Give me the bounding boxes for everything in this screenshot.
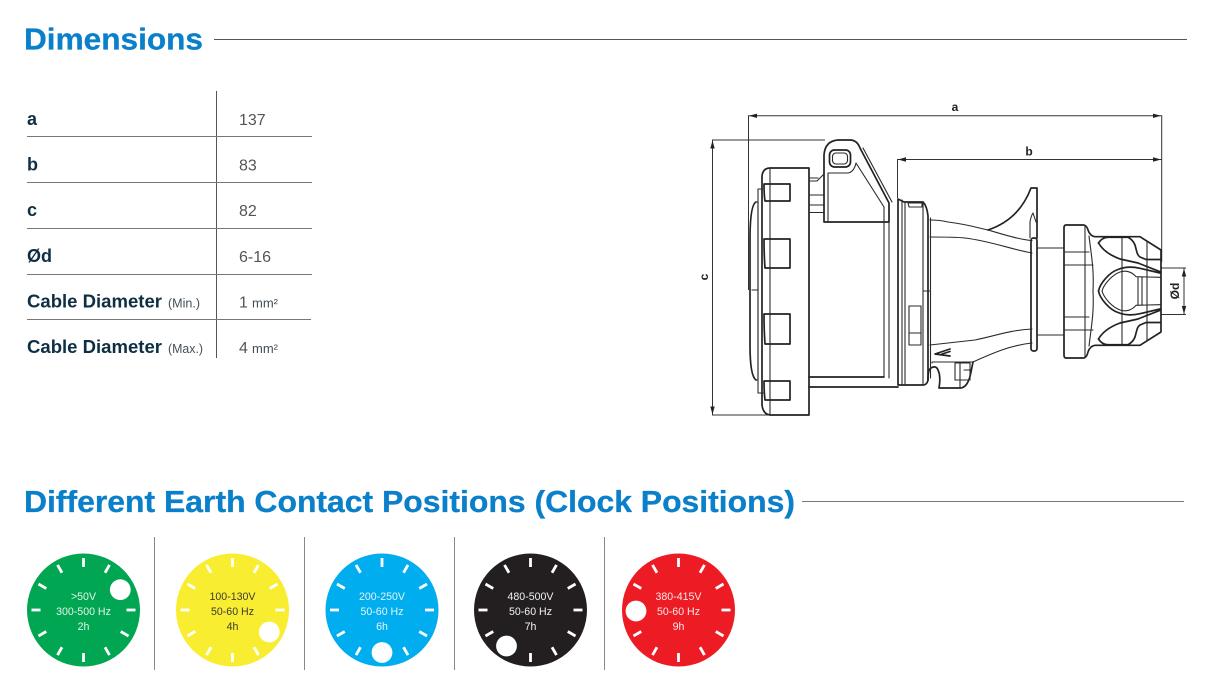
cable gland nut (1064, 225, 1161, 358)
front face and flange (750, 168, 809, 415)
row b: 83 (239, 158, 257, 174)
row cable diameter min: (Min.) (168, 296, 200, 310)
clock dial: red 9h: 9h (673, 621, 684, 633)
row cable diameter min (27, 292, 279, 312)
housing body (809, 174, 898, 387)
clock dial: red 9h: 50-60 Hz (657, 606, 700, 618)
dimension b (898, 144, 1162, 198)
row cable diameter max: (Max.) (168, 341, 203, 356)
row c (27, 200, 257, 220)
clock dial: green 2h: 300-500 Hz (56, 606, 111, 618)
clock dial: black 7h: 50-60 Hz (509, 606, 552, 618)
tapered grip (930, 220, 1032, 362)
row a (27, 109, 266, 129)
row cable diameter max: Cable Diameter (27, 337, 162, 357)
clock dial: blue 6h (326, 554, 438, 666)
clock dial: yellow 4h: 4h (227, 621, 238, 633)
row d (27, 246, 271, 266)
panel: dimensions table (27, 91, 312, 358)
heading: Dimensions: Dimensions (24, 22, 203, 56)
clock dial: yellow 4h: 50-60 Hz (211, 606, 254, 618)
row cable diameter max (27, 337, 279, 357)
dimension d: Ød (1168, 283, 1182, 299)
row cable diameter max: 4 (239, 340, 248, 357)
dimension d (1161, 268, 1186, 314)
dimension c (697, 140, 825, 415)
gland petals (1098, 237, 1160, 345)
clock dial: green 2h: >50V (71, 591, 96, 603)
clock dial: black 7h: 480-500V (508, 591, 553, 603)
row b: b (27, 154, 38, 174)
clock dial: yellow 4h (176, 554, 289, 666)
clock dial: blue 6h: 200-250V (359, 591, 405, 603)
dimension b: b (1025, 144, 1033, 158)
lid hinge (824, 140, 892, 222)
dimension a: a (952, 100, 959, 114)
dimension c: c (697, 273, 711, 280)
clock dial: black 7h (474, 554, 587, 666)
row a: 137 (239, 112, 266, 129)
row cable diameter min: 1 (239, 294, 248, 312)
lower latch (928, 362, 973, 388)
dimension a (748, 100, 1162, 290)
collar (898, 199, 930, 385)
clock dial: green 2h: 2h (78, 621, 89, 633)
row d: Ød (27, 246, 52, 266)
row cable diameter min: Cable Diameter (27, 292, 162, 312)
row c: c (27, 200, 37, 220)
clock dial: red 9h: 380-415V (656, 591, 701, 603)
heading: earth contact positions: Different Earth Contact Positions (Clock Positions) (24, 484, 795, 519)
strain relief fin and disc (988, 188, 1064, 351)
clock dial: blue 6h: 50-60 Hz (360, 606, 404, 618)
row cable diameter max: mm² (252, 341, 279, 356)
row b (27, 154, 257, 174)
clock dial: green 2h (27, 554, 140, 666)
row d: 6-16 (239, 249, 271, 266)
row a: a (27, 109, 38, 129)
clock dial: yellow 4h: 100-130V (210, 591, 255, 603)
row c: 82 (239, 203, 257, 220)
row cable diameter min: mm² (252, 296, 279, 310)
clock dial: blue 6h: 6h (376, 621, 388, 633)
technical drawing: socket side view (697, 100, 1186, 415)
clock dial: red 9h (622, 554, 735, 666)
clock dial: black 7h: 7h (525, 621, 536, 633)
